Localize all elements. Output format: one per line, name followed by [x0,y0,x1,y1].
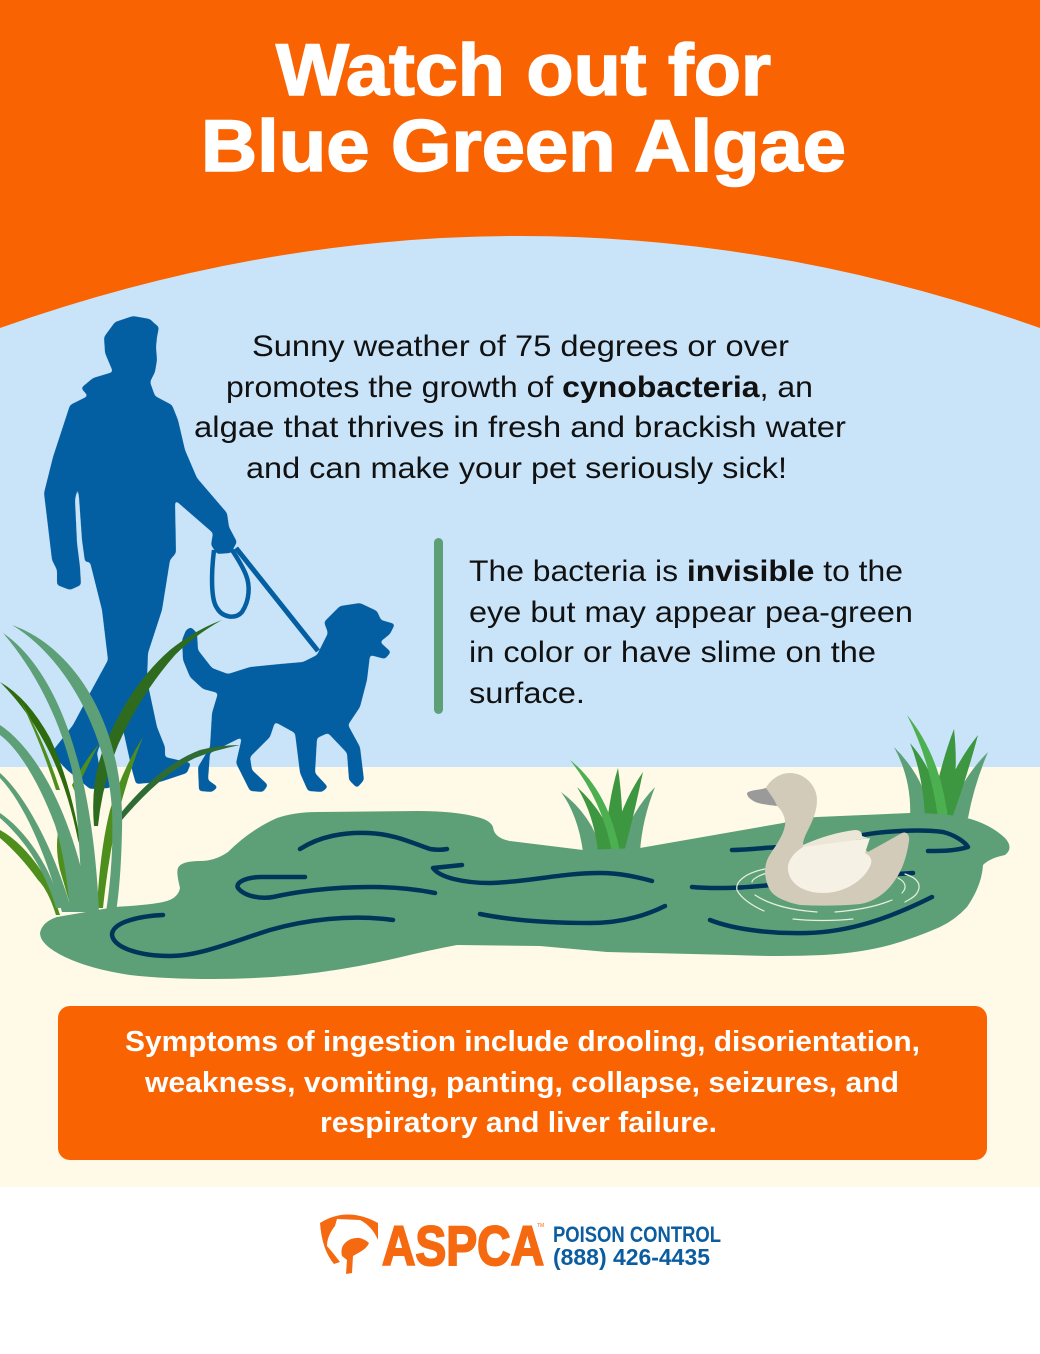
background: sand [0,767,1040,1187]
reed: sage E [0,813,62,908]
dog silhouette [182,603,395,792]
reed: dark low right [120,745,240,820]
symptoms text [125,1026,920,1139]
small reed tuft right [894,715,988,818]
reed: sage D [0,773,72,912]
title: Blue Green Algae [201,106,846,187]
ripples [737,869,919,920]
reed: olive centre [57,823,78,911]
logo poison control: POISON CONTROL [553,1222,721,1247]
bacteria text block: in color or have slime on the [469,636,876,669]
duck beak [747,788,777,806]
symptoms box [58,1006,987,1160]
reed: sage long B [3,633,99,912]
algae pond [40,811,1010,979]
accent bar [434,538,443,714]
duck wing [788,838,871,893]
bacteria text block: eye but may appear pea-green [469,596,913,629]
duck upper feather [803,830,868,848]
bacteria text block: surface. [469,677,585,710]
leash [212,548,318,651]
reed: dark long right [93,620,222,826]
reed: thin olive right [72,744,99,792]
logo trademark: TM [537,1223,544,1229]
small reed tuft centre [561,760,655,852]
ASPCA logo [320,1214,721,1277]
duck with ripples [737,773,919,920]
title [201,30,846,187]
reed: olive low left [0,830,60,915]
reed: thin olive [20,700,60,790]
duck body [765,773,909,906]
bacteria text block [469,555,913,710]
logo shield [320,1214,378,1274]
algae streaks [112,831,968,956]
symptoms text: Symptoms of ingestion include drooling, disorientation, [125,1026,920,1058]
background: footer [0,1187,1040,1354]
logo phone: (888) 426-4435 [553,1244,710,1270]
intro text block: promotes the growth of cynobacteria , an [226,371,813,404]
bacteria text block: The bacteria is invisible to the [469,555,903,588]
reed: olive right [97,737,143,908]
symptoms text: weakness, vomiting, panting, collapse, seizures, and [144,1067,899,1099]
intro text block: Sunny weather of 75 degrees or over [252,330,789,363]
title: Watch out for [276,30,771,111]
symptoms text: respiratory and liver failure. [320,1107,717,1139]
logo wordmark: ASPCA [382,1214,544,1277]
man silhouette [44,316,237,789]
reed: sage C [0,725,91,912]
tall reeds left [0,620,240,915]
reed: sage long A [12,625,122,912]
reed: dark left [0,682,82,852]
intro text block [194,330,846,485]
intro text block: algae that thrives in fresh and brackish water [194,411,846,444]
background: sky [0,200,1040,767]
intro text block: and can make your pet seriously sick! [246,452,787,485]
orange header with curved edge [0,0,1040,328]
